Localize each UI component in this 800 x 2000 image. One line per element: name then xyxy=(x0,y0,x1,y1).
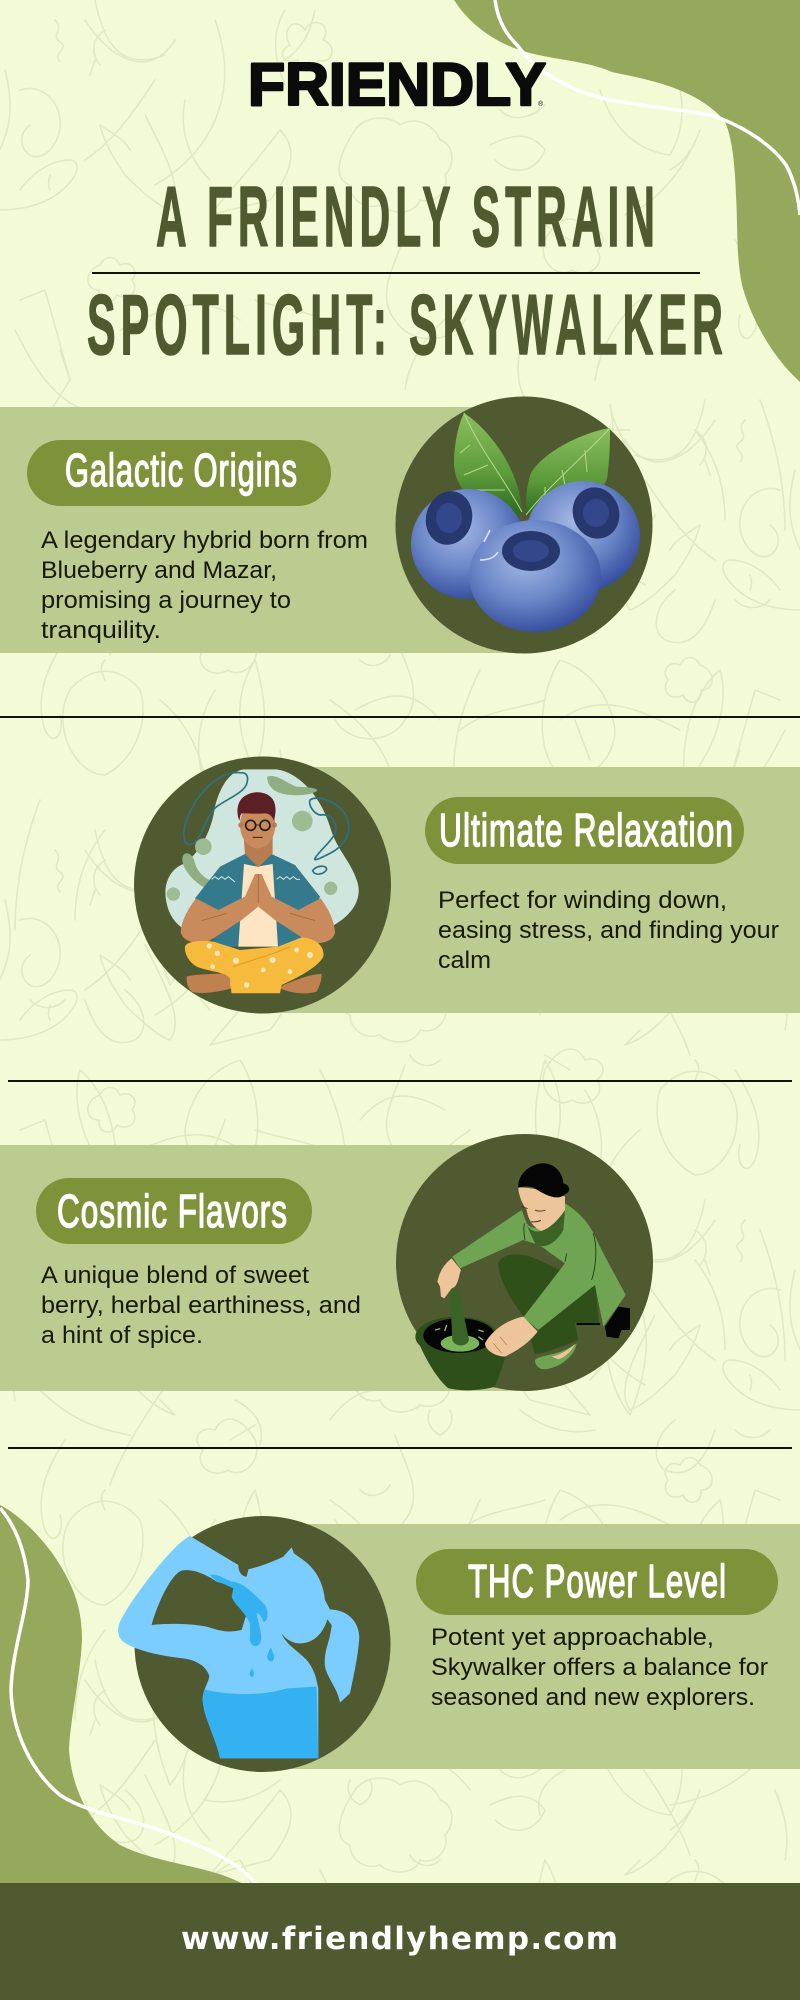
panel: thc power level xyxy=(118,1516,800,1772)
panel: ultimate relaxation xyxy=(134,756,800,1014)
divider xyxy=(8,1447,792,1449)
body text: Perfect for winding down, xyxy=(438,887,727,914)
title divider xyxy=(92,272,700,274)
body text: calm xyxy=(438,947,491,974)
body text: A unique blend of sweet xyxy=(41,1262,309,1289)
logo: ® xyxy=(538,100,544,108)
icon: person drinking water xyxy=(118,1536,359,1758)
body text xyxy=(41,527,368,644)
divider xyxy=(0,716,800,718)
footer: www.friendlyhemp.com xyxy=(181,1921,618,1957)
band xyxy=(262,767,800,1013)
pill heading xyxy=(36,1178,312,1244)
panel: galactic origins xyxy=(0,396,652,654)
decorative blob: top right xyxy=(454,0,800,382)
circle xyxy=(134,756,391,1014)
band xyxy=(262,1524,800,1769)
body text: berry, herbal earthiness, and xyxy=(41,1292,361,1319)
decorative swoosh: top right xyxy=(495,0,800,215)
decorative swoosh: bottom left xyxy=(0,1508,256,1884)
body text: a hint of spice. xyxy=(41,1322,203,1349)
body text: A legendary hybrid born from xyxy=(41,527,368,554)
body text: promising a journey to xyxy=(41,587,291,614)
icon: meditating man xyxy=(165,769,359,993)
decorative blob: bottom left xyxy=(0,1505,245,1885)
body text: Skywalker offers a balance for xyxy=(431,1654,768,1681)
icon: woman with mortar and pestle xyxy=(415,1163,630,1390)
panel: cosmic flavors xyxy=(0,1134,653,1391)
band xyxy=(0,1145,524,1391)
pill heading xyxy=(425,797,744,864)
divider xyxy=(8,1080,792,1082)
circle xyxy=(396,396,652,654)
footer xyxy=(0,1883,800,2000)
body text: easing stress, and finding your xyxy=(438,917,779,944)
circle xyxy=(396,1134,653,1391)
logo: FRIENDLY xyxy=(248,51,546,118)
body text: Blueberry and Mazar, xyxy=(41,557,277,584)
body text: Potent yet approachable, xyxy=(431,1624,714,1651)
pill heading: Galactic Origins xyxy=(65,444,298,496)
band xyxy=(0,407,524,653)
body text xyxy=(438,887,779,974)
pill heading xyxy=(416,1549,778,1615)
body text xyxy=(41,1262,361,1349)
icon: blueberries xyxy=(411,413,640,632)
body text: seasoned and new explorers. xyxy=(431,1684,755,1711)
body text xyxy=(431,1624,768,1711)
circle xyxy=(134,1516,390,1772)
pill heading xyxy=(27,440,331,506)
pill heading: Cosmic Flavors xyxy=(57,1185,288,1237)
body text: tranquility. xyxy=(41,617,161,644)
